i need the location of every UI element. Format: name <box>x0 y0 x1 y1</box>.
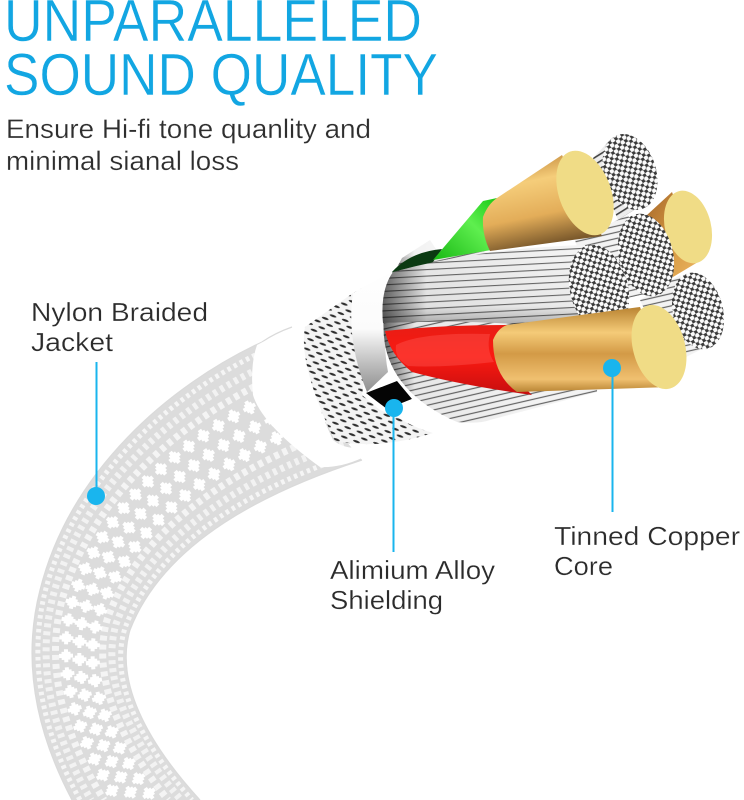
label: Alimium Alloy <box>330 555 495 585</box>
label: Tinned Copper <box>554 521 740 551</box>
label: Nylon Braided <box>31 297 208 327</box>
callout: aluminium alloy shielding <box>330 399 495 615</box>
gold core: top <box>483 143 624 251</box>
dark green sleeve shadow <box>392 249 442 278</box>
braided nylon cable <box>32 345 362 800</box>
white ferrule <box>252 325 362 467</box>
silver strand: back top <box>593 127 667 220</box>
subtitle <box>6 114 371 176</box>
gold core: front <box>493 299 695 395</box>
leader line <box>612 368 614 512</box>
callout: nylon braided jacket: Jacket <box>31 327 114 357</box>
subtitle: minimal sianal loss <box>6 146 239 176</box>
metal mesh shielding <box>304 272 433 444</box>
subtitle: Ensure Hi-fi tone quanlity and <box>6 114 371 144</box>
callout: tinned copper core: Core <box>554 551 613 581</box>
callout: aluminium alloy shielding: Shielding <box>330 585 443 615</box>
inner wire bundle backing <box>383 245 600 423</box>
dot <box>87 487 105 505</box>
black gap band <box>366 381 412 409</box>
silver strand: middle <box>575 208 682 305</box>
green insulation <box>433 198 497 260</box>
cable end assembly <box>252 127 732 467</box>
leader line <box>392 408 394 552</box>
white inner shield <box>351 266 402 392</box>
white lower shield <box>387 399 457 433</box>
silver strand: large front <box>382 238 638 340</box>
callout: tinned copper core <box>554 359 740 581</box>
title line 2: SOUND QUALITY <box>4 42 438 108</box>
dot <box>603 359 621 377</box>
gold core: right <box>647 186 719 277</box>
dot <box>385 399 403 417</box>
silver strand: right <box>640 267 732 365</box>
title <box>4 0 438 108</box>
cable outline <box>32 327 362 800</box>
leader line <box>96 362 98 496</box>
callout: nylon braided jacket <box>31 297 208 505</box>
red insulation <box>385 325 532 395</box>
